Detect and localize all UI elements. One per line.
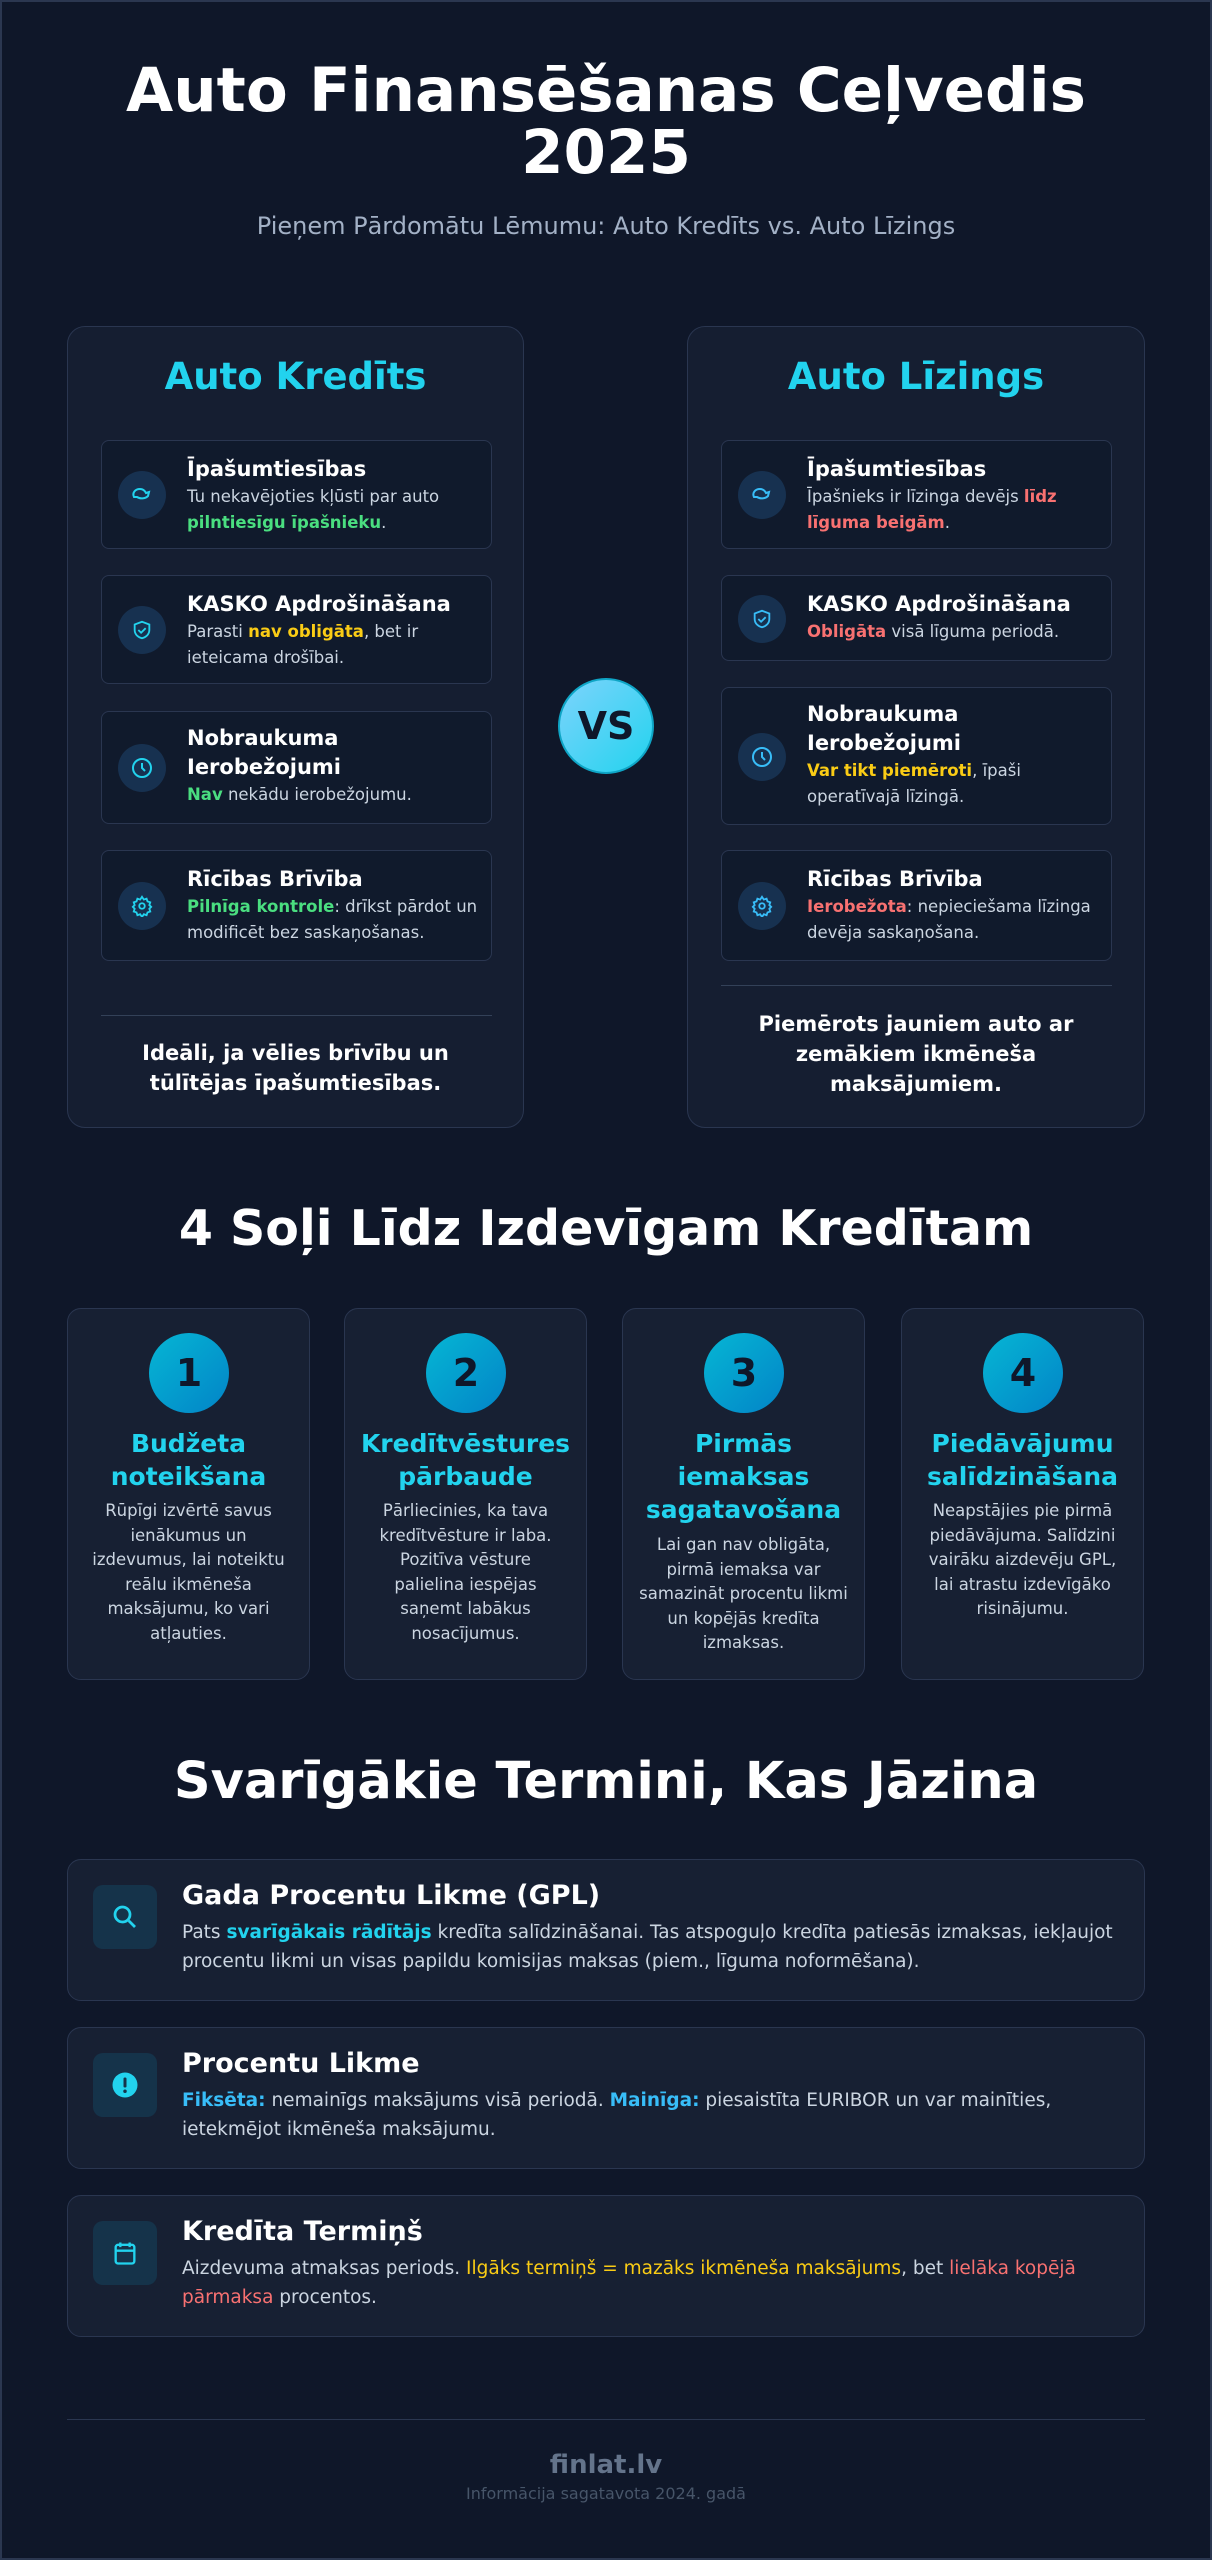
item: freedom: Rīcības Brīvība xyxy=(187,867,363,891)
vs badge: VS xyxy=(578,704,634,748)
step 3: Lai gan nav obligāta, pirmā iemaksa var samazināt procentu likmi un kopējās kredīta izmaksas. xyxy=(639,1535,848,1652)
title xyxy=(126,55,1086,188)
icon: shield xyxy=(738,595,786,643)
icon: alert xyxy=(93,2053,157,2117)
item: kasko: KASKO Apdrošināšana xyxy=(187,592,451,616)
step 3: Pirmās iemaksas sagatavošana xyxy=(646,1429,841,1524)
title: 2025 xyxy=(521,117,691,188)
title: Auto Finansēšanas Ceļvedis xyxy=(126,55,1086,126)
item: mileage: Nobraukuma Ierobežojumi xyxy=(187,726,341,779)
item: mileage xyxy=(101,711,492,824)
icon: car xyxy=(118,471,166,519)
step 1: 1 xyxy=(176,1351,202,1395)
step 2: Pārliecinies, ka tava kredītvēsture ir laba. Pozitīva vēsture palielina iespējas saņemt labākus nosacījumus. xyxy=(379,1501,552,1642)
panel footer text: Piemērots jauniem auto ar zemākiem ikmēneša maksājumiem. xyxy=(759,1012,1073,1096)
step 4 xyxy=(901,1308,1144,1680)
term: GPL: Pats svarīgākais rādītājs kredīta salīdzināšanai. Tas atspoguļo kredīta patiesās izmaksas, iekļaujot procentu likmi un visas papildu komisijas maksas (piem., līguma noformēšana). xyxy=(182,1922,1113,1972)
heading: steps: 4 Soļi Līdz Izdevīgam Kredītam xyxy=(179,1200,1033,1257)
icon: search xyxy=(93,1885,157,1949)
step 4: Piedāvājumu salīdzināšana xyxy=(927,1429,1118,1491)
item: kasko: KASKO Apdrošināšana xyxy=(807,592,1071,616)
icon: clock xyxy=(738,733,786,781)
step 3: 3 xyxy=(731,1351,757,1395)
subtitle: Pieņem Pārdomātu Lēmumu: Auto Kredīts vs. Auto Līzings xyxy=(257,212,955,240)
icon: car xyxy=(738,471,786,519)
icon: shield xyxy=(118,606,166,654)
item: kasko: Obligāta visā līguma periodā. xyxy=(807,622,1059,641)
item: ownership xyxy=(721,440,1112,549)
item: freedom xyxy=(101,850,492,961)
item: kasko xyxy=(101,575,492,684)
step 2: Kredītvēstures pārbaude xyxy=(361,1429,570,1491)
item: ownership xyxy=(101,440,492,549)
item: mileage xyxy=(721,687,1112,825)
item: freedom xyxy=(721,850,1112,961)
icon: gear xyxy=(118,882,166,930)
item: freedom: Ierobežota: nepieciešama līzinga devēja saskaņošana. xyxy=(807,897,1091,942)
heading: Auto Kredīts xyxy=(165,355,426,398)
item: kasko xyxy=(721,575,1112,661)
step 1: Rūpīgi izvērtē savus ienākumus un izdevumus, lai noteiktu reālu ikmēneša maksājumu, ko vari atļauties. xyxy=(92,1501,285,1642)
term: rate: Procentu Likme xyxy=(182,2048,420,2079)
step 4: 4 xyxy=(1010,1351,1036,1395)
term: rate xyxy=(67,2027,1145,2169)
icon: clock xyxy=(118,744,166,792)
heading: Auto Līzings xyxy=(788,355,1044,398)
term: GPL: Gada Procentu Likme (GPL) xyxy=(182,1880,600,1911)
panel: auto lizings xyxy=(687,326,1145,1128)
footer xyxy=(466,2450,746,2503)
panel footer text: Ideāli, ja vēlies brīvību un tūlītējas īpašumtiesības. xyxy=(142,1041,449,1095)
item: freedom: Rīcības Brīvība xyxy=(807,867,983,891)
term: period: Aizdevuma atmaksas periods. Ilgāks termiņš = mazāks ikmēneša maksājums, bet lielāka kopējā pārmaksa procentos. xyxy=(182,2258,1076,2308)
item: kasko: Parasti nav obligāta, bet ir ieteicama drošībai. xyxy=(187,622,418,667)
step 3 xyxy=(622,1308,865,1680)
footer: finlat.lv xyxy=(550,2450,662,2480)
item: mileage: Nav nekādu ierobežojumu. xyxy=(187,785,412,804)
heading: terms: Svarīgākie Termini, Kas Jāzina xyxy=(174,1752,1038,1811)
item: ownership: Īpašnieks ir līzinga devējs līdz līguma beigām. xyxy=(807,487,1057,532)
term: rate: Fiksēta: nemainīgs maksājums visā periodā. Mainīga: piesaistīta EURIBOR un var mainīties, ietekmējot ikmēneša maksājumu. xyxy=(182,2090,1051,2140)
vs badge xyxy=(558,678,654,774)
step 2 xyxy=(344,1308,587,1680)
step 1 xyxy=(67,1308,310,1680)
item: ownership: Tu nekavējoties kļūsti par auto pilntiesīgu īpašnieku. xyxy=(187,487,439,532)
term: GPL xyxy=(67,1859,1145,2001)
item: freedom: Pilnīga kontrole: drīkst pārdot un modificēt bez saskaņošanas. xyxy=(187,897,477,942)
icon: gear xyxy=(738,882,786,930)
panel: auto kredits xyxy=(67,326,524,1128)
footer: Informācija sagatavota 2024. gadā xyxy=(466,2484,746,2503)
item: ownership: Īpašumtiesības xyxy=(187,457,366,481)
item: ownership: Īpašumtiesības xyxy=(807,457,986,481)
step 1: Budžeta noteikšana xyxy=(111,1429,266,1491)
item: mileage: Nobraukuma Ierobežojumi xyxy=(807,702,961,755)
item: mileage: Var tikt piemēroti, īpaši operatīvajā līzingā. xyxy=(807,761,1021,806)
term: period: Kredīta Termiņš xyxy=(182,2216,423,2247)
term: period xyxy=(67,2195,1145,2337)
step 4: Neapstājies pie pirmā piedāvājuma. Salīdzini vairāku aizdevēju GPL, lai atrastu izdevīgāko risinājumu. xyxy=(929,1501,1116,1618)
icon: calendar xyxy=(93,2221,157,2285)
step 2: 2 xyxy=(453,1351,479,1395)
